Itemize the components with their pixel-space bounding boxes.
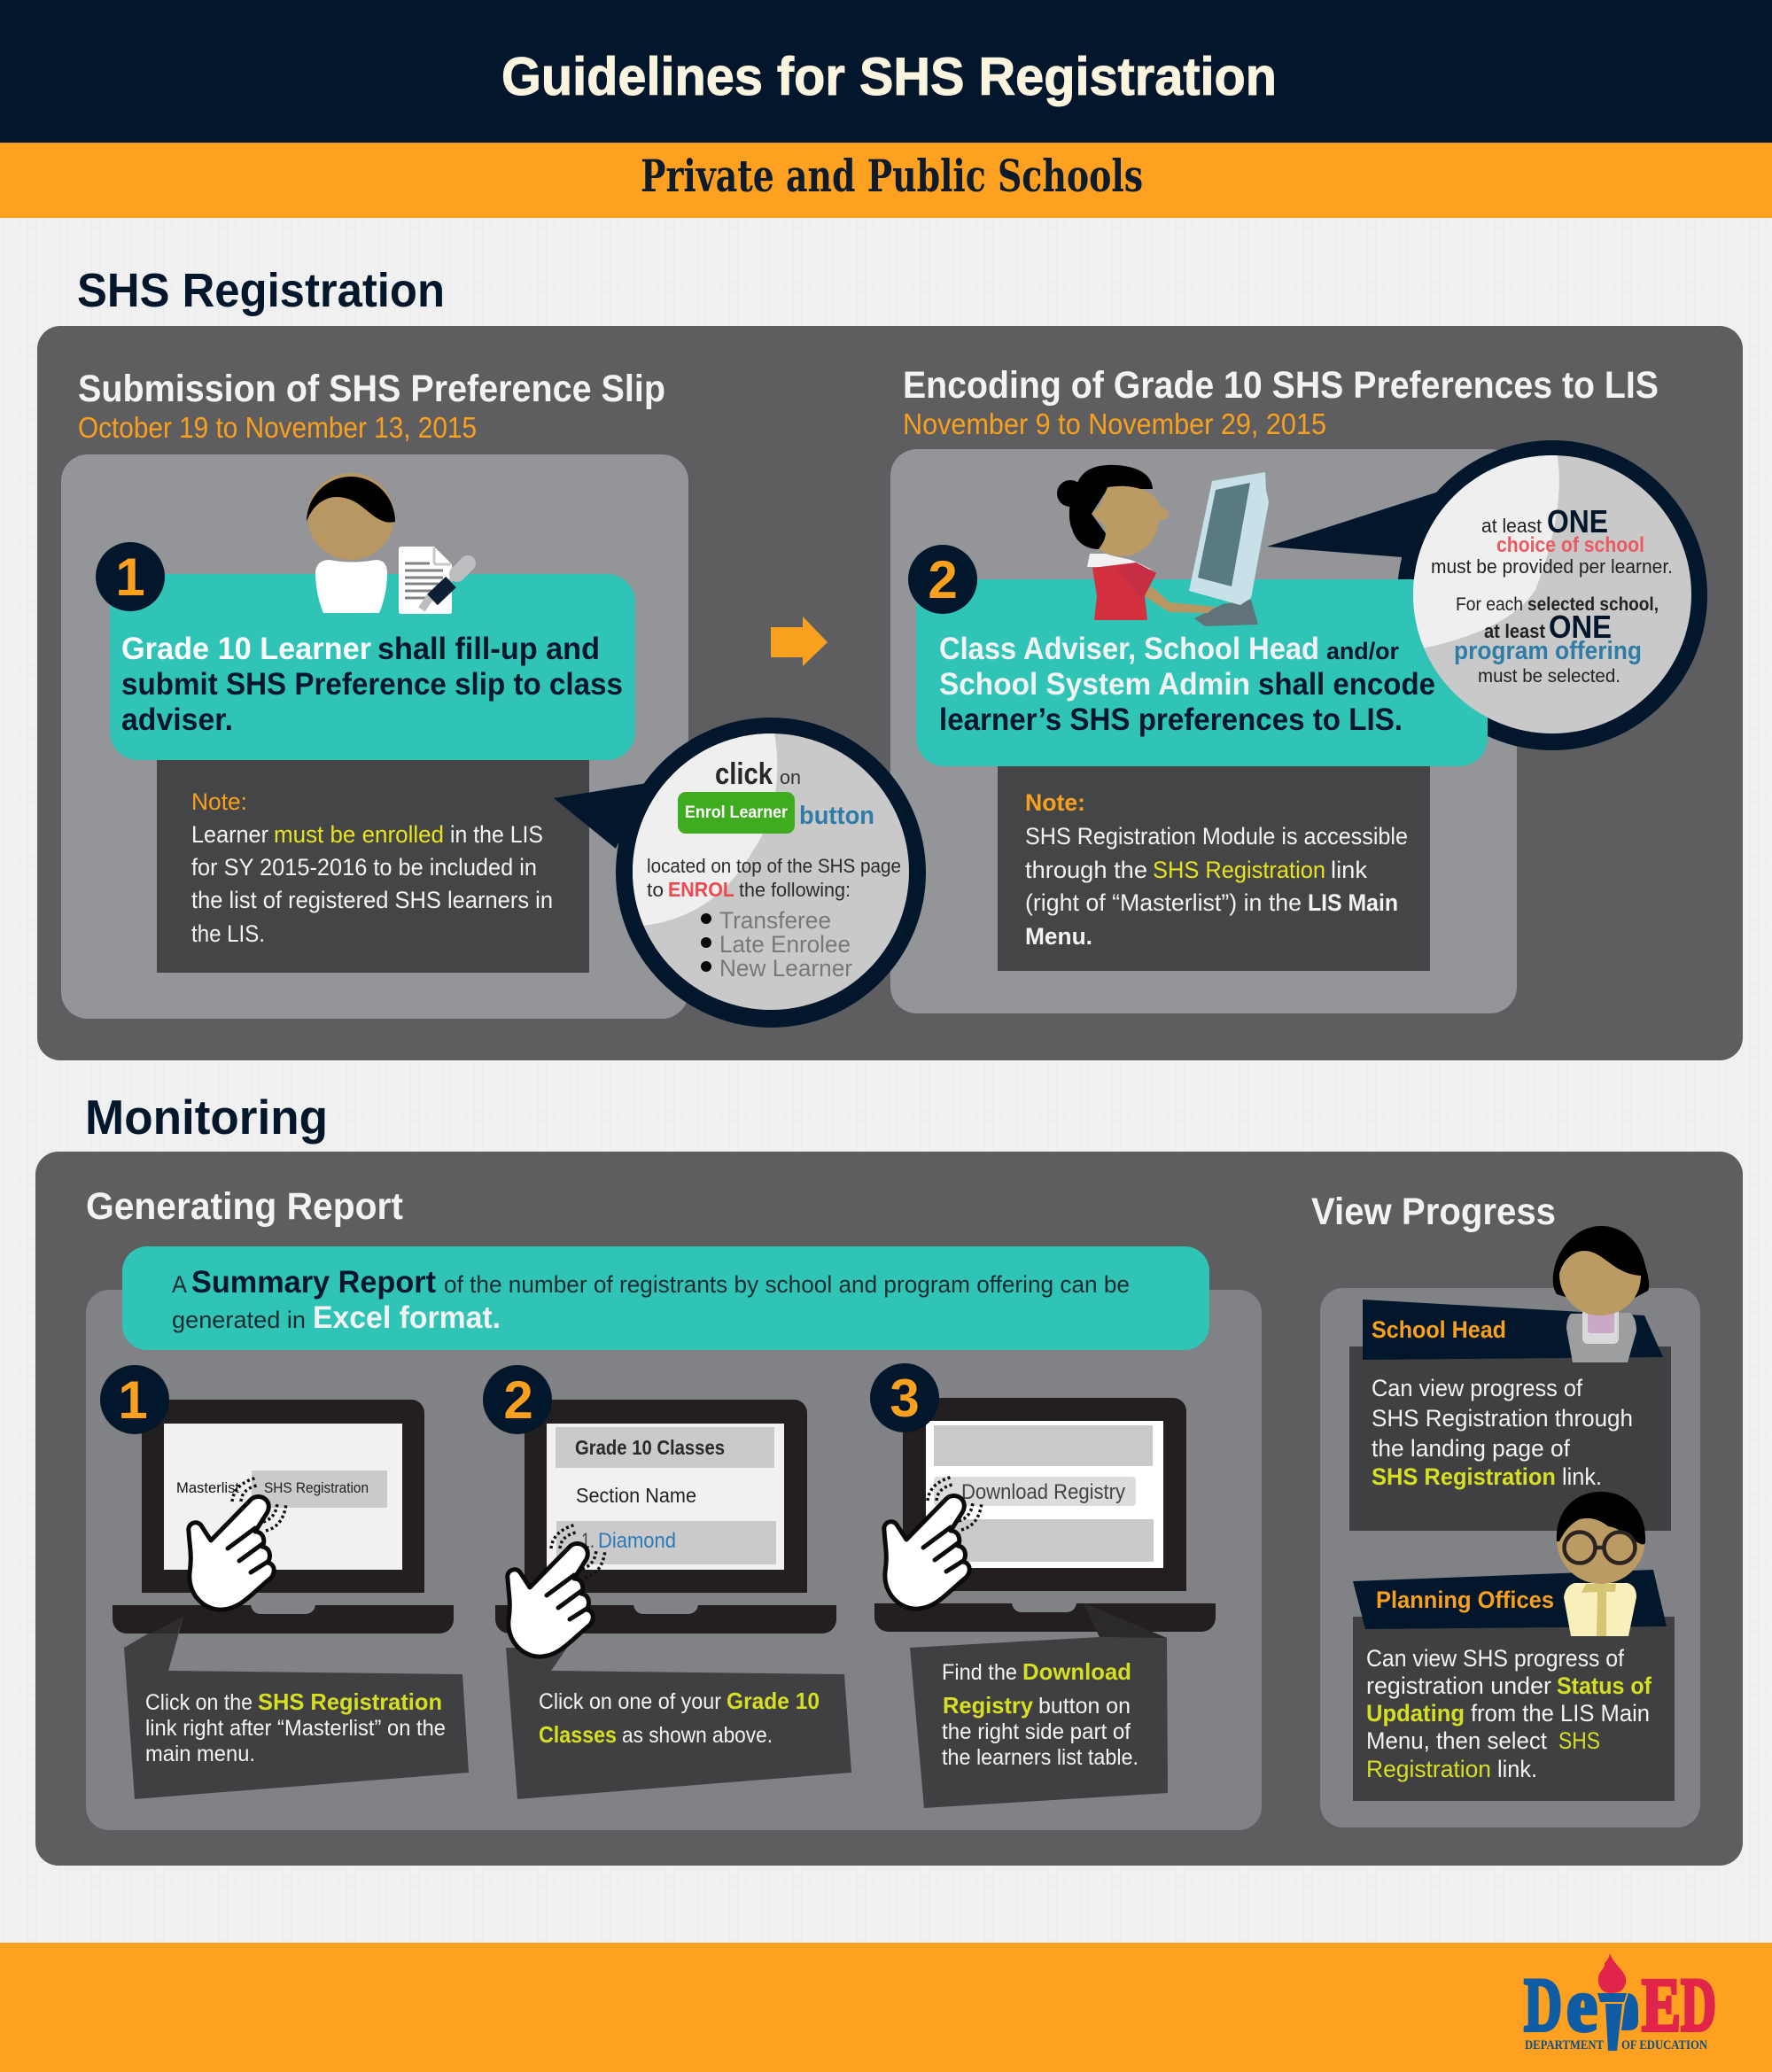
card: planning offices: Updating (1366, 1700, 1465, 1727)
teal box: step 1 statement: submit SHS Preference slip to class (121, 667, 623, 702)
laptop 1: Masterlist (176, 1479, 239, 1496)
note: learner must be enrolled: Note: (191, 788, 247, 815)
heading: submission of preference slip: October 19 to November 13, 2015 (78, 411, 477, 444)
callout bubble: click enrol learner: ENROL (668, 878, 734, 901)
note: learner must be enrolled: must be enrolled (274, 821, 444, 848)
callout: step 3 instruction: Find the (942, 1660, 1017, 1685)
heading: SHS Registration: SHS Registration (77, 264, 445, 317)
card: planning offices: Menu, then select (1366, 1727, 1547, 1754)
callout: step 2 instruction: Click on one of your (539, 1689, 721, 1714)
heading: Monitoring: Monitoring (85, 1090, 328, 1145)
note: module access: Menu. (1025, 923, 1092, 950)
logo: DepED: e (1566, 1962, 1597, 2047)
teal box: summary report: Excel format. (313, 1300, 501, 1335)
teal box: summary report: A (172, 1271, 187, 1298)
teal box: step 2 statement (916, 579, 1488, 766)
callout: step 2 instruction: as shown above. (622, 1723, 773, 1748)
heading: encoding of preferences: November 9 to November 29, 2015 (903, 407, 1326, 440)
callout bubble: one choice of school: at least (1481, 515, 1542, 537)
heading: view progress: View Progress (1311, 1191, 1556, 1233)
callout bubble: click enrol learner: Late Enrolee (719, 931, 851, 958)
step number 1: 1 (118, 1370, 148, 1430)
callout: step 1 instruction (124, 1617, 469, 1799)
footer band (0, 1943, 1772, 2072)
note: learner must be enrolled: for SY 2015-2016 to be included in (191, 854, 537, 881)
panel: SHS registration (37, 326, 1743, 1060)
heading: encoding of preferences (903, 364, 1659, 440)
teal box: step 1 statement: Grade 10 Learner (121, 632, 371, 666)
bubble ring and pointer (1267, 440, 1707, 750)
step number 2 (908, 545, 977, 614)
callout bubble: one choice of school: at least (1484, 620, 1546, 642)
card: planning offices: registration under (1366, 1672, 1551, 1699)
callout: step 1 instruction: link right after “Masterlist” on the (145, 1716, 446, 1741)
callout: step 3 instruction: button on (1038, 1694, 1131, 1719)
step number 2: 2 (503, 1370, 533, 1430)
step number 1: 1 (115, 547, 145, 607)
callout bubble: one choice of school: For each (1456, 594, 1523, 615)
note: module access: through the (1025, 857, 1147, 883)
header band (0, 0, 1772, 143)
callout bubble: click enrol learner: on (780, 766, 801, 788)
teal box: summary report (122, 1246, 1209, 1350)
laptop 2 (495, 1400, 836, 1634)
step number 3 (870, 1363, 939, 1432)
callout: step 3 instruction: Registry (943, 1692, 1034, 1719)
callout: step 3 instruction: the right side part of (942, 1719, 1131, 1744)
heading: submission of preference slip: Submission of SHS Preference Slip (78, 368, 665, 410)
card: planning offices: from the LIS Main (1471, 1700, 1650, 1727)
button: enrol learner: Enrol Learner (685, 803, 789, 822)
card: planning offices: Registration (1366, 1756, 1491, 1782)
note: module access: (right of “Masterlist”) in the (1025, 889, 1302, 916)
teal box: step 1 statement (110, 574, 635, 760)
icon: pointing hand 3 (884, 1477, 982, 1609)
laptop 2: 1. (581, 1529, 595, 1553)
laptop 1: SHS Registration (264, 1479, 369, 1496)
step number 2: 2 (928, 550, 958, 609)
callout: step 2 instruction: Classes (539, 1721, 617, 1748)
callout bubble: click enrol learner: to (647, 879, 664, 901)
callout bubble: one choice of school (1400, 447, 1691, 733)
card: school head: Can view progress of (1372, 1375, 1582, 1401)
laptop 2: Section Name (576, 1484, 696, 1507)
card: planning offices: SHS (1558, 1727, 1600, 1754)
callout bubble: click enrol learner: the following: (739, 879, 851, 901)
card: school head: the landing page of (1372, 1435, 1570, 1462)
laptop 3: Download Registry (961, 1480, 1125, 1504)
step number 2 (483, 1365, 552, 1434)
callout bubble: one choice of school: program offering (1454, 637, 1642, 665)
icon: planning officer (1557, 1492, 1645, 1636)
title: Guidelines for SHS Registration (501, 47, 1277, 106)
card: school head (1349, 1300, 1671, 1531)
callout bubble: click enrol learner: Transferee (719, 907, 831, 934)
subtitle: Private and Public Schools (641, 150, 1143, 202)
card: school head: School Head (1372, 1316, 1506, 1343)
card: planning offices: Can view SHS progress of (1366, 1645, 1624, 1672)
teal box: summary report: of the number of registrants by school and program offering can be (444, 1271, 1130, 1298)
arrow (771, 617, 828, 666)
step number 1 (96, 542, 165, 611)
card: planning offices (1353, 1570, 1675, 1801)
heading: generating report: Generating Report (86, 1185, 403, 1228)
callout: step 2 instruction (506, 1648, 851, 1799)
teal box: step 1 statement: shall fill-up and (377, 632, 600, 666)
panel: generating report steps (86, 1290, 1262, 1830)
button: enrol learner (678, 792, 795, 834)
logo: DepED: D (1681, 1962, 1716, 2047)
note: module access: SHS Registration (1153, 857, 1325, 883)
teal box: summary report: Summary Report (191, 1265, 436, 1300)
callout bubble: one choice of school: ONE (1549, 609, 1612, 645)
note: module access: link (1331, 857, 1368, 883)
teal box: step 2 statement: and/or (1326, 638, 1399, 664)
panel: monitoring (35, 1152, 1743, 1866)
callout: step 1 instruction: Click on the (145, 1690, 253, 1715)
teal box: step 2 statement: School System Admin (939, 667, 1250, 702)
icon: school head (1553, 1226, 1649, 1362)
callout: step 3 instruction: Download (1022, 1658, 1131, 1685)
callout: step 1 instruction: SHS Registration (258, 1688, 442, 1715)
panel: step 1 background (61, 454, 688, 1019)
callout bubble: click enrol learner (554, 718, 926, 1028)
teal box: step 2 statement: shall encode (1258, 667, 1435, 702)
card: school head: SHS Registration through (1372, 1405, 1633, 1432)
icon: computer monitor (1189, 472, 1269, 626)
callout: step 2 instruction: Grade 10 (727, 1688, 820, 1714)
note: learner must be enrolled: the list of registered SHS learners in (191, 887, 553, 913)
note: module access: LIS Main (1308, 889, 1398, 916)
note: learner must be enrolled: the LIS. (191, 920, 265, 947)
card: planning offices: Planning Offices (1376, 1587, 1554, 1613)
logo: DepED: E (1642, 1962, 1681, 2047)
note: module access: SHS Registration Module is accessible (1025, 823, 1408, 850)
icon: class adviser (1057, 465, 1216, 620)
laptop 2: Diamond (598, 1529, 676, 1553)
logo: DepED: D (1524, 1962, 1562, 2047)
teal box: step 2 statement: learner’s SHS preferences to LIS. (939, 702, 1403, 737)
callout bubble: one choice of school: selected school, (1527, 594, 1659, 615)
callout bubble: click enrol learner: New Learner (719, 955, 852, 982)
icon: grade 10 learner (307, 473, 395, 613)
note: learner must be enrolled: Learner (191, 821, 268, 848)
heading: submission of preference slip (78, 368, 665, 444)
note: learner must be enrolled: in the LIS (450, 821, 543, 848)
logo: DepED: OF EDUCATION (1621, 2038, 1707, 2053)
icon: pointing hand 2 (508, 1525, 605, 1657)
callout bubble: one choice of school: choice of school (1496, 533, 1644, 557)
callout bubble: click enrol learner: located on top of the SHS page (647, 855, 901, 877)
icon: document and pen (399, 547, 468, 614)
callout bubble: click enrol learner: button (799, 802, 874, 830)
logo: DepED: DEPARTMENT (1525, 2038, 1604, 2053)
heading: encoding of preferences: Encoding of Grade 10 SHS Preferences to LIS (903, 364, 1659, 407)
laptop 2: Grade 10 Classes (575, 1436, 725, 1459)
teal box: step 1 statement: adviser. (121, 702, 233, 737)
card: planning offices: link. (1497, 1756, 1537, 1782)
teal box: summary report: generated in (172, 1307, 306, 1333)
teal box: step 2 statement: Class Adviser, School Head (939, 632, 1319, 666)
callout bubble: one choice of school: must be selected. (1478, 666, 1620, 687)
icon: pointing hand 1 (189, 1478, 286, 1610)
callout: step 3 instruction (910, 1603, 1168, 1808)
laptop 3 (874, 1398, 1216, 1632)
card: school head: link. (1562, 1463, 1602, 1490)
callout: step 3 instruction: the learners list table. (942, 1745, 1139, 1770)
callout: step 1 instruction: main menu. (145, 1742, 255, 1766)
note: module access: Note: (1025, 789, 1085, 816)
card: planning offices: Status of (1557, 1672, 1652, 1699)
step number 1 (100, 1365, 169, 1434)
step number 3: 3 (890, 1369, 920, 1428)
panel: view progress (1320, 1288, 1700, 1828)
card: school head: SHS Registration (1372, 1463, 1556, 1490)
callout bubble: click enrol learner: click (715, 757, 773, 791)
subtitle band (0, 143, 1772, 218)
callout bubble: one choice of school: ONE (1547, 503, 1608, 539)
laptop 1 (113, 1400, 454, 1634)
callout bubble: one choice of school: must be provided per learner. (1431, 555, 1673, 578)
logo: DepED (1524, 1953, 1716, 2053)
note: module access (998, 766, 1430, 971)
note: learner must be enrolled (157, 760, 589, 973)
panel: step 2 background (890, 449, 1517, 1013)
